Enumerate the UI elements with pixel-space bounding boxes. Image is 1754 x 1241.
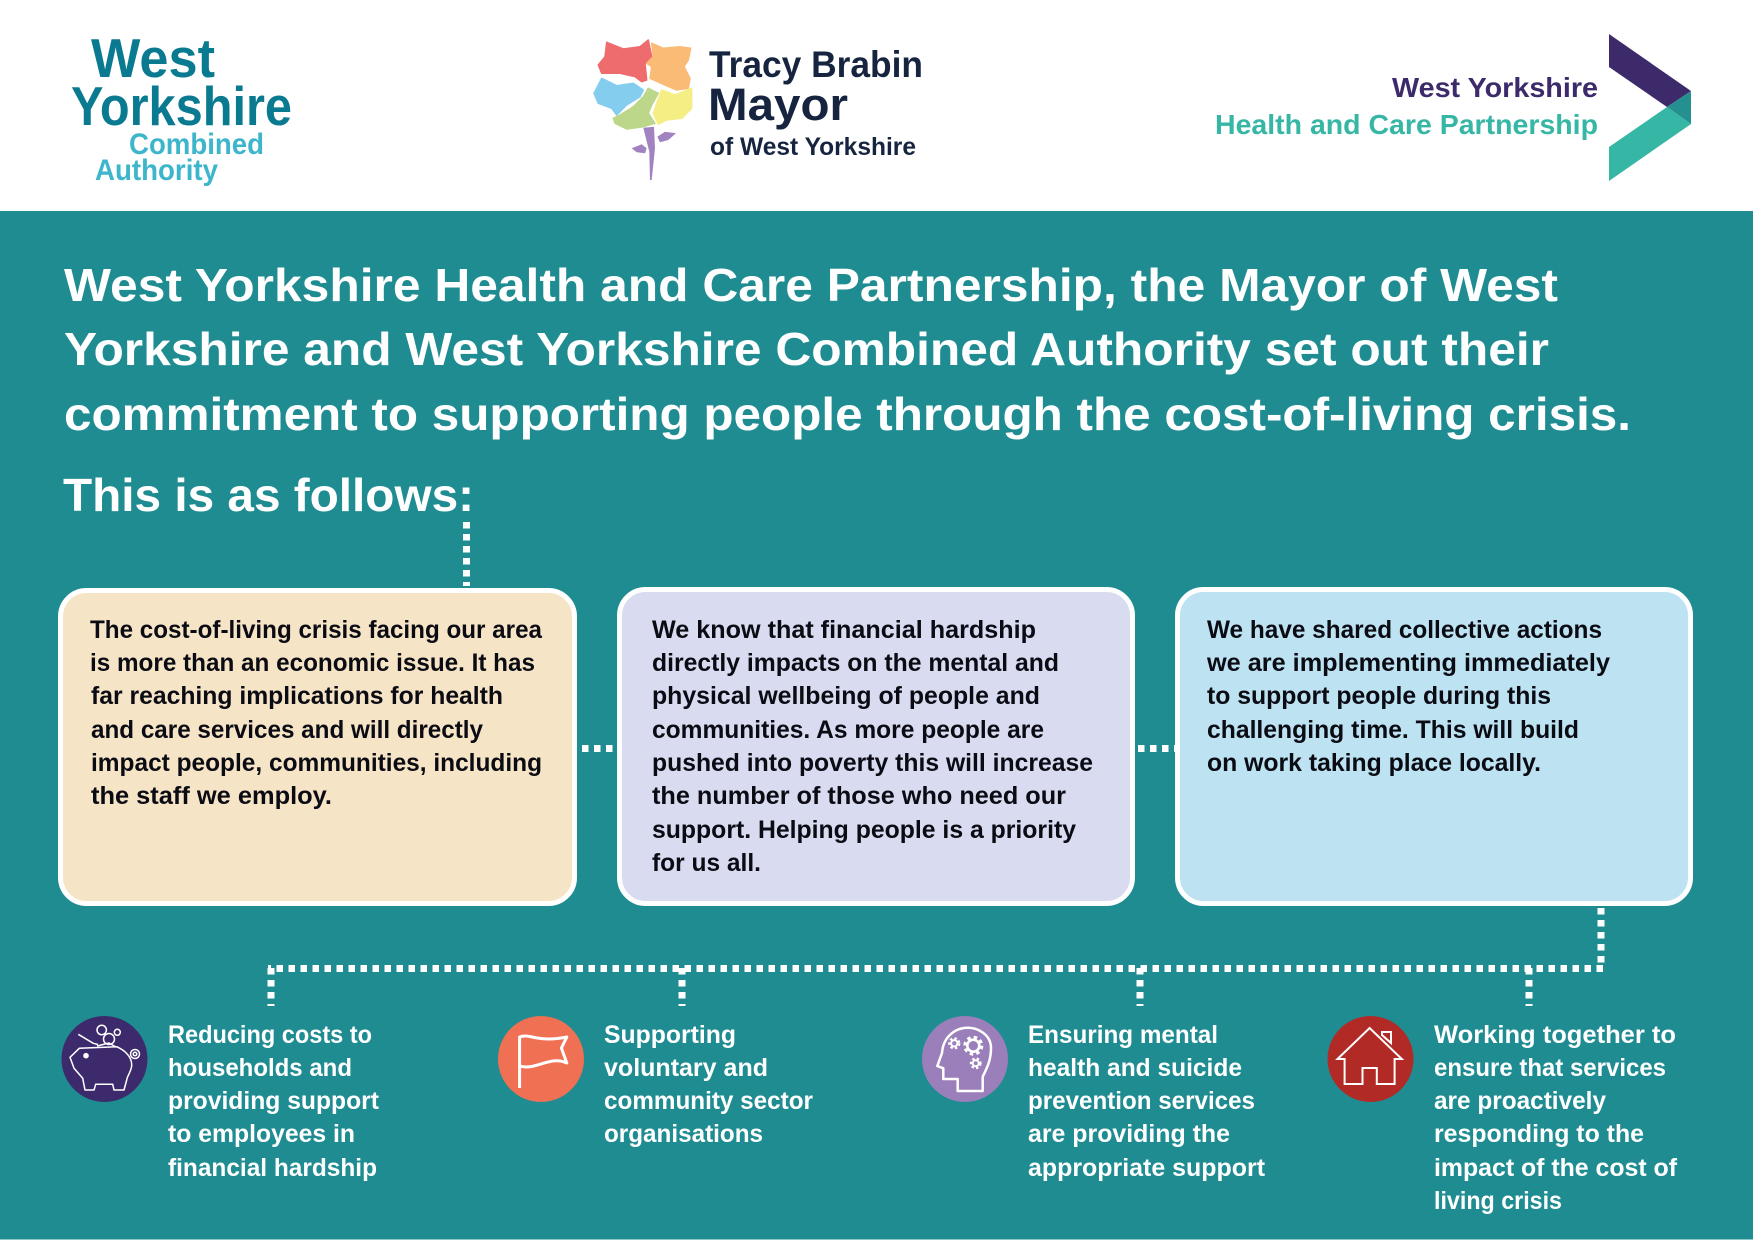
panel: economic issue — [60, 590, 574, 904]
text: community sector — [604, 1087, 813, 1115]
panel: collective actions: to support people during this — [1207, 682, 1551, 710]
text: are providing the — [1028, 1120, 1230, 1148]
panel: economic issue: and care services and will directly — [91, 716, 483, 744]
logo: Tracy Brabin Mayor of West Yorkshire: Mayor — [708, 79, 848, 130]
text: prevention services — [1028, 1087, 1255, 1115]
action: voluntary sector — [498, 1016, 813, 1148]
text: are proactively — [1434, 1087, 1606, 1115]
text: living crisis — [1434, 1187, 1562, 1215]
text: providing support — [168, 1087, 380, 1115]
panel: financial hardship: for us all. — [652, 849, 761, 877]
text: health and suicide — [1028, 1054, 1242, 1082]
icon: piggy bank — [62, 1016, 148, 1102]
text: responding to the — [1434, 1120, 1644, 1148]
text: Working together to — [1434, 1021, 1676, 1049]
icon: house — [1328, 1016, 1414, 1102]
text: households and — [168, 1054, 352, 1082]
logo: West Yorkshire Health and Care Partnership — [1215, 34, 1691, 181]
panel: financial hardship — [620, 590, 1132, 904]
panel: financial hardship: pushed into poverty this will increase — [652, 749, 1093, 777]
icon: chevron — [1609, 34, 1691, 181]
panel: financial hardship: We know that financial hardship — [652, 616, 1036, 644]
text — [168, 1021, 380, 1182]
subheading: This is as follows: — [63, 469, 474, 521]
text: financial hardship — [168, 1154, 377, 1182]
panel: collective actions: We have shared collective actions — [1207, 616, 1602, 644]
dotted connectors — [268, 522, 1603, 1006]
logo: West Yorkshire Combined Authority: West — [91, 27, 215, 89]
text — [1434, 1021, 1678, 1215]
logo: West Yorkshire Health and Care Partnership: Health and Care Partnership — [1215, 109, 1598, 140]
panel: economic issue: is more than an economic issue. It has — [90, 649, 535, 677]
panel: economic issue: The cost-of-living crisis facing our area — [90, 616, 543, 644]
icon: head with gears — [922, 1016, 1008, 1102]
panel: economic issue: far reaching implications for health — [91, 682, 503, 710]
panel: economic issue: the staff we employ. — [91, 782, 332, 810]
text: Ensuring mental — [1028, 1021, 1218, 1049]
text: appropriate support — [1028, 1154, 1266, 1182]
logo: Tracy Brabin Mayor of West Yorkshire — [594, 40, 923, 180]
logo: West Yorkshire Combined Authority: Yorkshire — [71, 75, 292, 137]
panel: financial hardship: the number of those who need our — [652, 782, 1066, 810]
text: organisations — [604, 1120, 763, 1148]
text: to employees in — [168, 1120, 355, 1148]
text: Supporting — [604, 1021, 736, 1049]
text — [1028, 1021, 1266, 1182]
panel: collective actions: challenging time. This will build — [1207, 716, 1579, 744]
panel: financial hardship: directly impacts on the mental and — [652, 649, 1059, 677]
logo: Tracy Brabin Mayor of West Yorkshire: Tracy Brabin — [709, 44, 923, 85]
action: working together — [1328, 1016, 1678, 1215]
title: West Yorkshire Health and Care Partnership, the Mayor of West — [64, 259, 1558, 311]
action: mental health — [922, 1016, 1266, 1182]
logo: West Yorkshire Combined Authority: Authority — [95, 154, 218, 187]
icon: flag — [498, 1016, 584, 1102]
action: reducing costs — [62, 1016, 380, 1182]
panel: financial hardship: support. Helping people is a priority — [652, 816, 1076, 844]
text: Reducing costs to — [168, 1021, 372, 1049]
panel: economic issue: impact people, communities, including — [91, 749, 542, 777]
logo: Tracy Brabin Mayor of West Yorkshire: of West Yorkshire — [710, 133, 916, 161]
logo: West Yorkshire Health and Care Partnership: West Yorkshire — [1392, 72, 1598, 103]
panel: financial hardship: physical wellbeing of people and — [652, 682, 1040, 710]
title: Yorkshire and West Yorkshire Combined Authority set out their — [64, 323, 1549, 375]
text: impact of the cost of — [1434, 1154, 1678, 1182]
panel: financial hardship: communities. As more people are — [652, 716, 1044, 744]
title: commitment to supporting people through the cost-of-living crisis. — [64, 388, 1631, 440]
panel: collective actions: on work taking place locally. — [1207, 749, 1541, 777]
title — [64, 259, 1631, 440]
text: ensure that services — [1434, 1054, 1666, 1082]
panel: collective actions: we are implementing immediately — [1206, 649, 1610, 677]
logo: West Yorkshire Combined Authority — [71, 27, 292, 187]
logo: West Yorkshire Combined Authority: Combined — [129, 128, 264, 161]
text — [604, 1021, 813, 1148]
text: voluntary and — [604, 1054, 768, 1082]
icon: flower map — [594, 40, 692, 180]
header band — [0, 0, 1754, 211]
panel: collective actions — [1178, 590, 1690, 904]
